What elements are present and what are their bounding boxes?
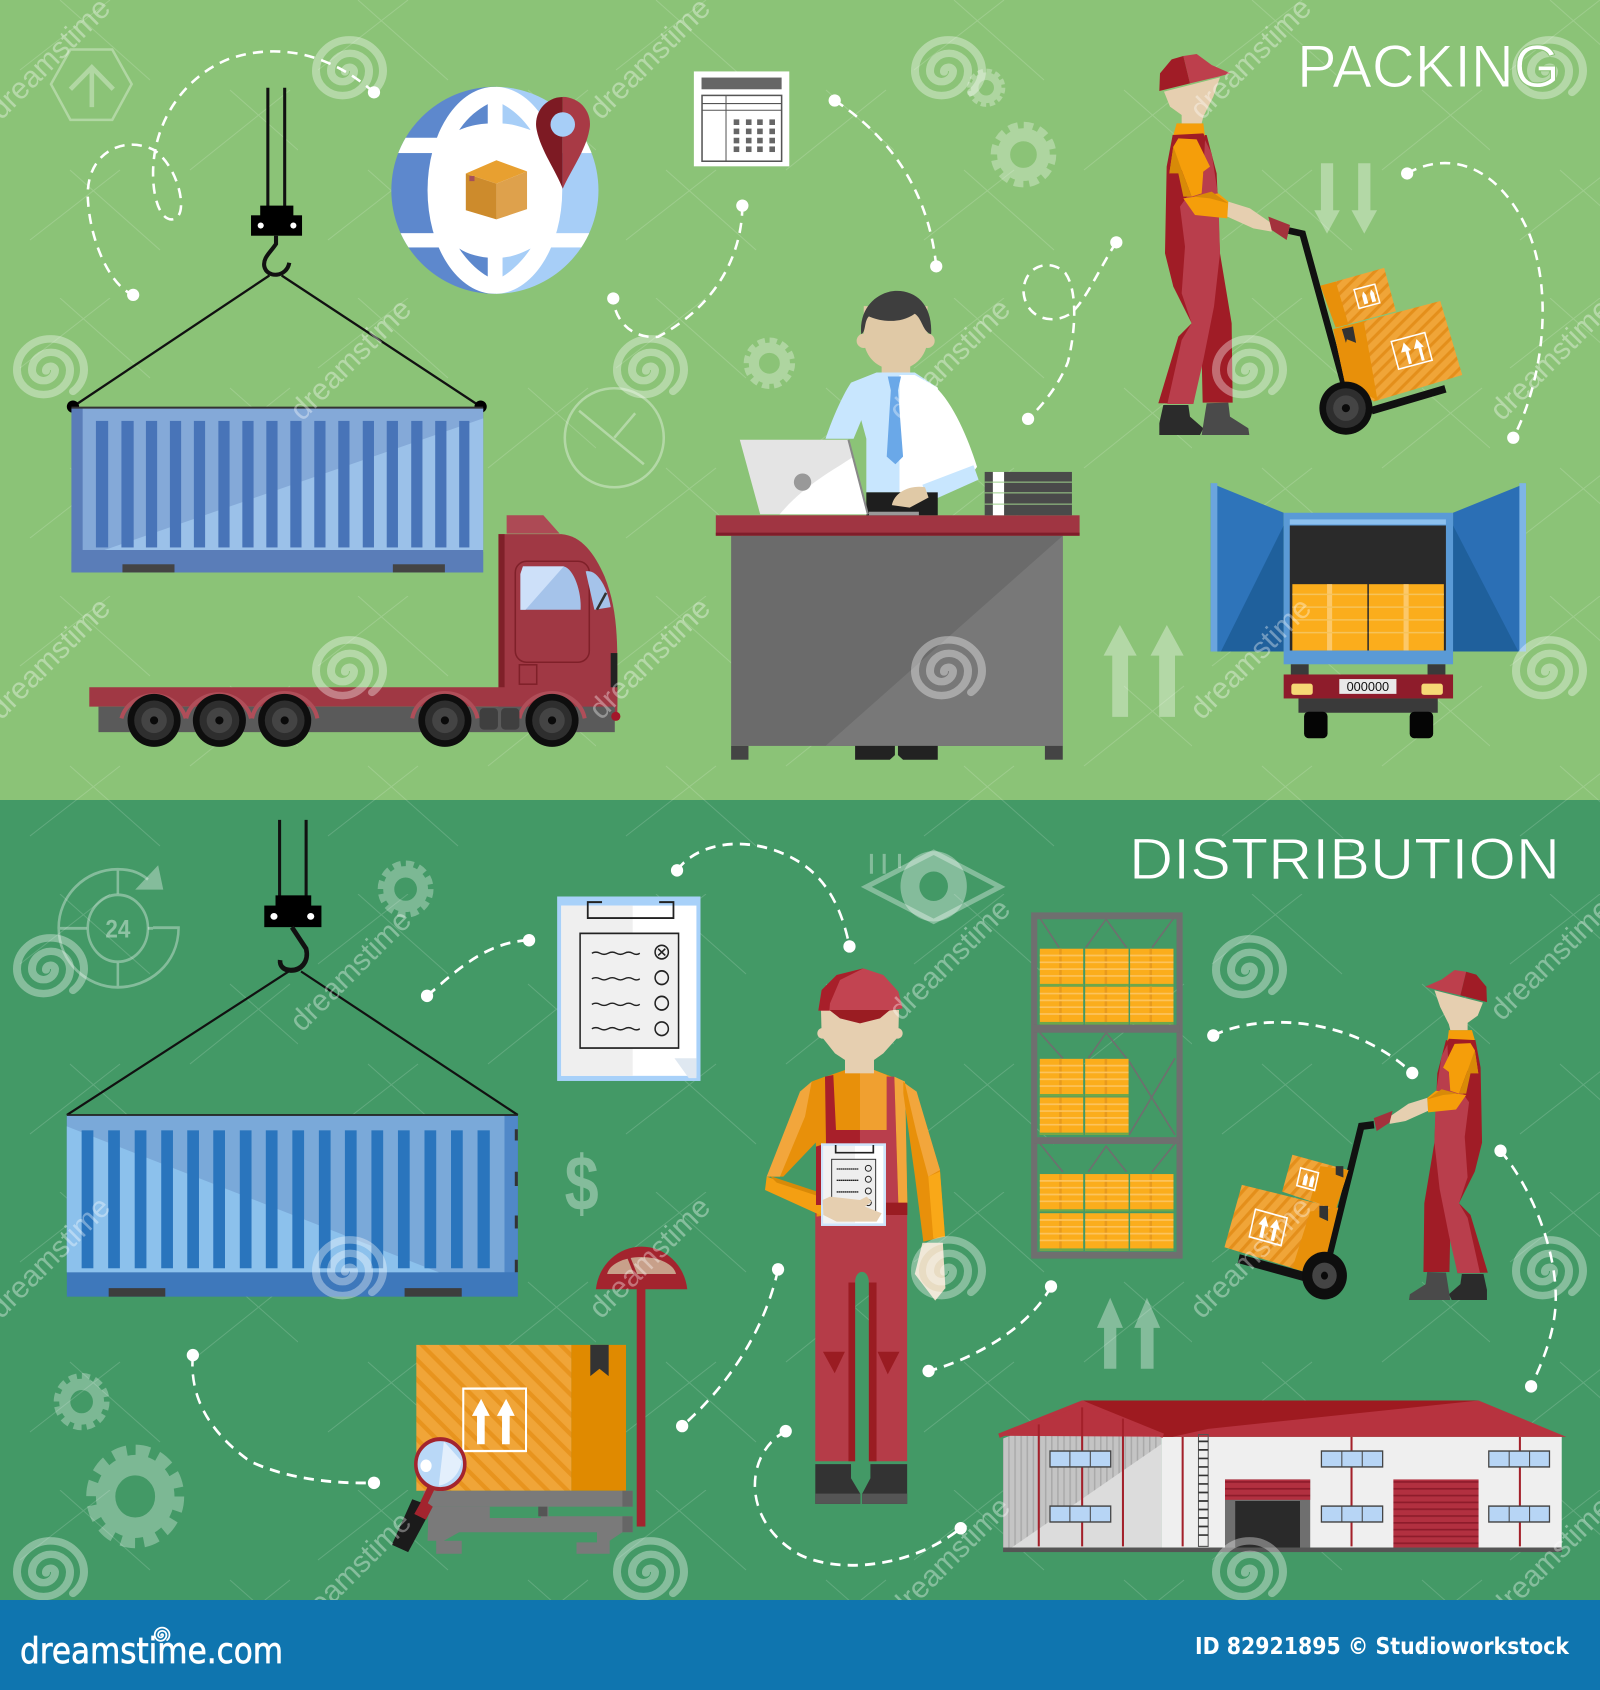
office worker	[826, 291, 979, 515]
shipping container: distribution	[67, 1115, 518, 1297]
icon: 24 hour clock: 24	[105, 916, 131, 944]
panel: packing background	[0, 0, 1600, 800]
dashed route: bottom loop	[755, 1425, 967, 1565]
clipboard document	[557, 896, 701, 1081]
watermark text: dreamstime	[284, 1506, 418, 1640]
heading: packing: PACKING	[1297, 33, 1560, 100]
footer brand: dreamstime.com	[20, 1631, 283, 1672]
watermark text: dreamstime	[883, 1491, 1017, 1625]
icon: gear left large	[92, 1451, 178, 1542]
shipping container: packing	[71, 408, 483, 572]
dashed route: under calendar	[607, 199, 748, 337]
warehouse storage rack	[1034, 916, 1180, 1255]
crane hook and slings: distribution	[67, 820, 518, 1115]
delivery truck rear view	[1211, 483, 1526, 738]
dashed route: right arc	[1401, 163, 1543, 444]
watermark text: dreamstime	[883, 293, 1017, 427]
icon: large gear	[995, 126, 1052, 183]
icon: small gear	[970, 71, 1003, 104]
icon: gear	[747, 341, 792, 386]
icon: 24 hour clock	[59, 865, 179, 987]
warehouse worker upper body	[765, 968, 945, 1242]
footer bar	[0, 1600, 1600, 1690]
watermark text: dreamstime	[1184, 1191, 1318, 1325]
arrows up	[1104, 625, 1184, 717]
worker pushing hand truck: packing	[1158, 54, 1290, 435]
dashed route: top left loop	[88, 51, 380, 301]
delivery truck rear view: 000000	[1347, 679, 1389, 694]
dashed route: to clipboard	[421, 934, 535, 1002]
globe with package and map pin	[388, 84, 604, 296]
watermark text: dreamstime	[583, 1191, 717, 1325]
weighing scale with box	[416, 1247, 687, 1554]
desk	[716, 515, 1080, 760]
warehouse building	[999, 1401, 1566, 1552]
watermark text: dreamstime	[284, 293, 418, 427]
truck	[89, 515, 620, 747]
dashed route: top centre	[829, 94, 942, 272]
watermark text: dreamstime	[284, 904, 418, 1038]
dashed route: scale to worker	[676, 1263, 784, 1432]
dashed route: top centre arc	[671, 844, 856, 953]
laptop	[740, 440, 868, 514]
arrows up: warehouse	[1097, 1298, 1160, 1369]
icon: gear left small	[57, 1377, 106, 1427]
heading: distribution: DISTRIBUTION	[1129, 827, 1560, 892]
icon: dollar sign: $	[565, 1138, 599, 1227]
icon: clock	[565, 388, 664, 487]
worker pushing hand truck: distribution	[1374, 970, 1488, 1300]
dashed route: rack to worker	[922, 1280, 1057, 1377]
hand truck with boxes	[1289, 231, 1462, 435]
hand truck with boxes: distribution	[1224, 1125, 1374, 1299]
watermark text: dreamstime	[1184, 592, 1318, 726]
dashed route: lower left	[187, 1349, 380, 1489]
icon: hexagon arrow	[51, 49, 132, 120]
panel: distribution background	[0, 800, 1600, 1600]
arrows down	[1314, 163, 1377, 234]
icon: calendar sheet	[694, 71, 789, 166]
magnifying glass	[392, 1439, 465, 1552]
dashed route: far right arc	[1494, 1145, 1556, 1393]
crane hook and slings	[67, 88, 487, 413]
stack of books	[985, 472, 1072, 515]
icon: eye	[866, 851, 1000, 921]
dashed route: above right worker	[1207, 1022, 1418, 1079]
warehouse worker legs	[815, 1203, 945, 1504]
icon: gear top	[381, 864, 430, 914]
watermark text: dreamstime	[883, 893, 1017, 1027]
watermark text: dreamstime	[583, 592, 717, 726]
dashed route: loop near worker	[1022, 236, 1122, 425]
